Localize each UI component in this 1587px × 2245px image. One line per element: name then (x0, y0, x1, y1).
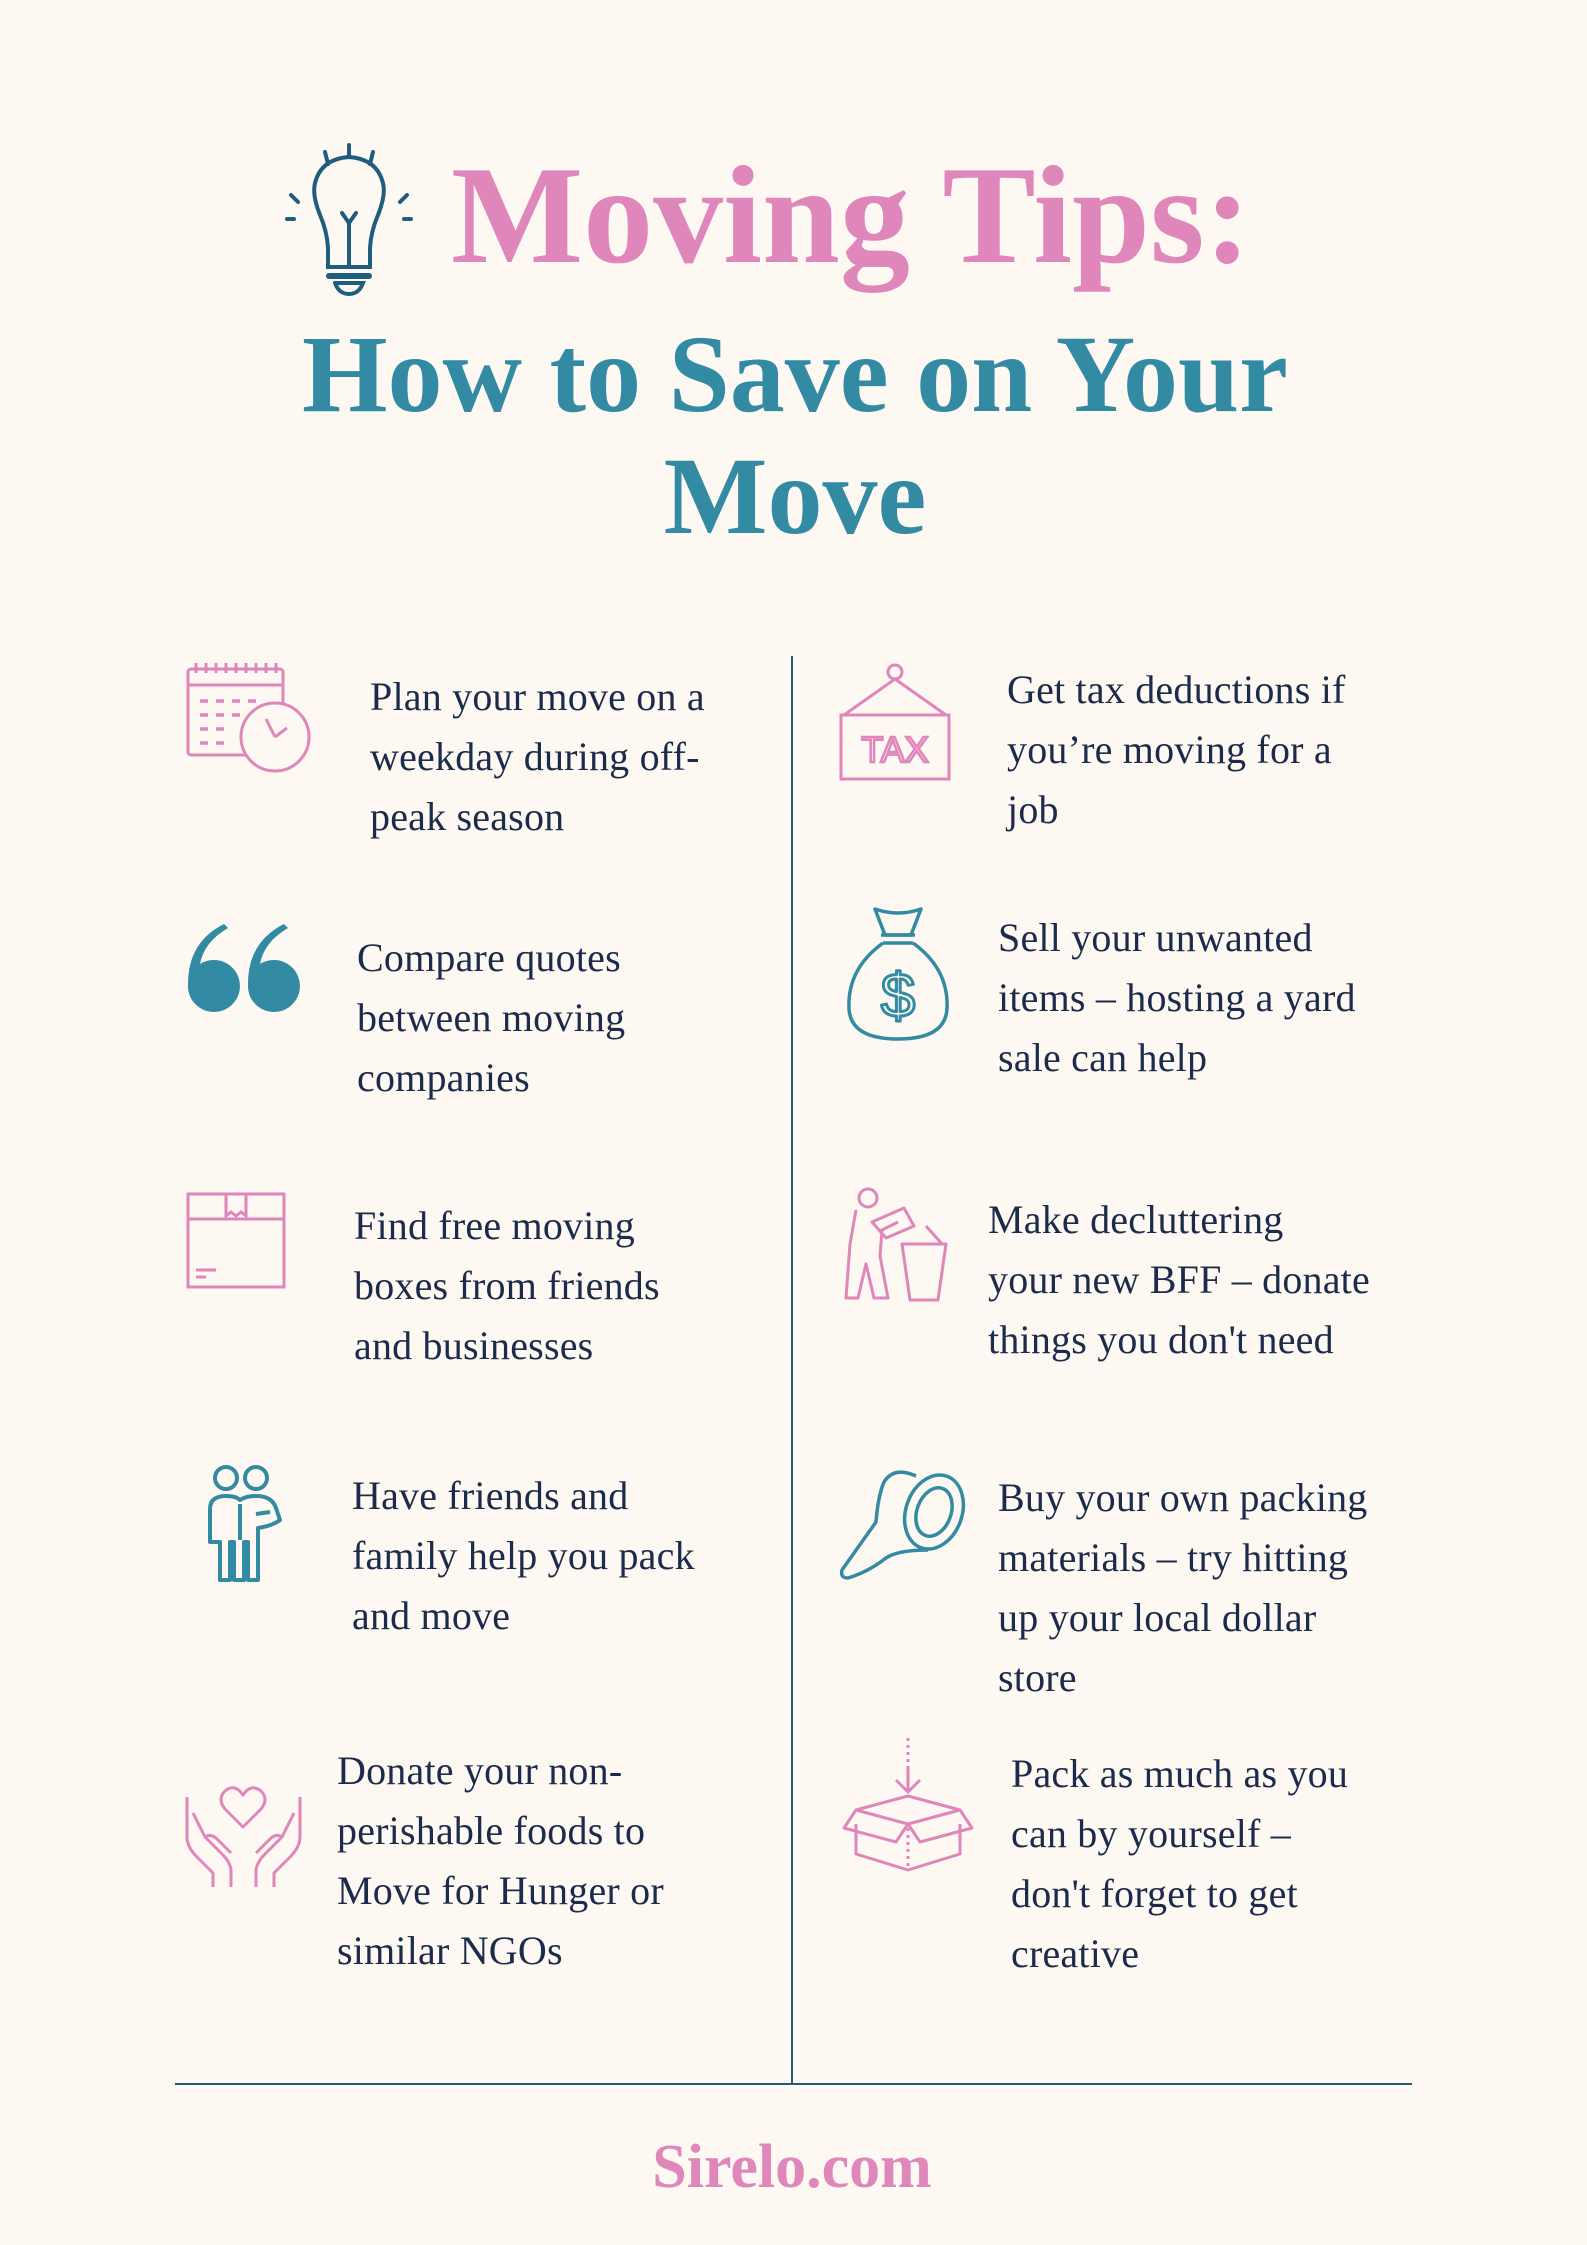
text: can by yourself – (1011, 1811, 1291, 1856)
tip 6: tax (840, 664, 1346, 832)
text: job (1007, 787, 1059, 832)
text: perishable foods to (337, 1808, 645, 1853)
tip 3: box (186, 1192, 660, 1368)
icon: box (186, 1192, 286, 1288)
text: Make decluttering (988, 1197, 1284, 1242)
icon: tax sign: TAX (861, 729, 929, 770)
icon: calendar clock (186, 663, 310, 772)
divider: horizontal (175, 2083, 1412, 2085)
text (998, 915, 1356, 1080)
text: companies (357, 1055, 530, 1100)
text: Donate your non- (337, 1748, 622, 1793)
text: materials – try hitting (998, 1535, 1348, 1580)
icon: lightbulb (285, 143, 413, 296)
text: Find free moving (354, 1203, 635, 1248)
subtitle (302, 313, 1288, 557)
text: creative (1011, 1931, 1139, 1976)
text: don't forget to get (1011, 1871, 1298, 1916)
text: store (998, 1655, 1077, 1700)
text: your new BFF – donate (988, 1257, 1370, 1302)
text (337, 1748, 664, 1973)
text: and businesses (354, 1323, 593, 1368)
text: weekday during off- (370, 734, 700, 779)
text (370, 674, 705, 839)
text: Have friends and (352, 1473, 628, 1518)
subtitle: How to Save on Your (302, 313, 1288, 435)
icon: hands with heart (186, 1786, 302, 1887)
text: you’re moving for a (1007, 727, 1332, 772)
title: Moving Tips: Moving Tips: (451, 138, 1251, 293)
icon: tape roll (840, 1470, 966, 1580)
icon: person dropping item in bin (844, 1188, 948, 1302)
text: boxes from friends (354, 1263, 660, 1308)
text: and move (352, 1593, 510, 1638)
text: between moving (357, 995, 625, 1040)
text (354, 1203, 660, 1368)
tip 4: family (208, 1465, 695, 1638)
text: Move for Hunger or (337, 1868, 664, 1913)
text (998, 1475, 1368, 1700)
tip 5: hands heart (186, 1748, 664, 1973)
text: Plan your move on a (370, 674, 705, 719)
icon: money bag (847, 907, 949, 1041)
tip 7: money bag (847, 907, 1356, 1080)
text: Pack as much as you (1011, 1751, 1348, 1796)
text: Sell your unwanted (998, 915, 1313, 960)
text: items – hosting a yard (998, 975, 1356, 1020)
text: things you don't need (988, 1317, 1334, 1362)
icon: open box with arrow (842, 1738, 974, 1872)
text: family help you pack (352, 1533, 695, 1578)
icon: money bag: $ (881, 962, 915, 1031)
tip 2: quotes (188, 924, 625, 1100)
text (1006, 667, 1346, 832)
tip 1: calendar (186, 663, 705, 839)
text: Buy your own packing (998, 1475, 1368, 1520)
tip 8: decluttering (844, 1188, 1370, 1362)
icon: two people (208, 1465, 282, 1582)
text: Get tax deductions if (1007, 667, 1346, 712)
text (352, 1473, 695, 1638)
icon: tax sign (840, 664, 950, 780)
footer: Sirelo.com: Sirelo.com (652, 2133, 932, 2201)
subtitle: Move (664, 435, 926, 557)
text: similar NGOs (337, 1928, 563, 1973)
text: Compare quotes (357, 935, 621, 980)
text (988, 1197, 1370, 1362)
text: peak season (370, 794, 564, 839)
text (357, 935, 625, 1100)
text (1011, 1751, 1348, 1976)
text: up your local dollar (998, 1595, 1316, 1640)
divider: vertical (791, 656, 793, 2085)
text: sale can help (998, 1035, 1207, 1080)
tip 10: pack box (842, 1738, 1348, 1976)
tip 9: tape (840, 1470, 1368, 1700)
icon: quote marks (188, 924, 300, 1012)
